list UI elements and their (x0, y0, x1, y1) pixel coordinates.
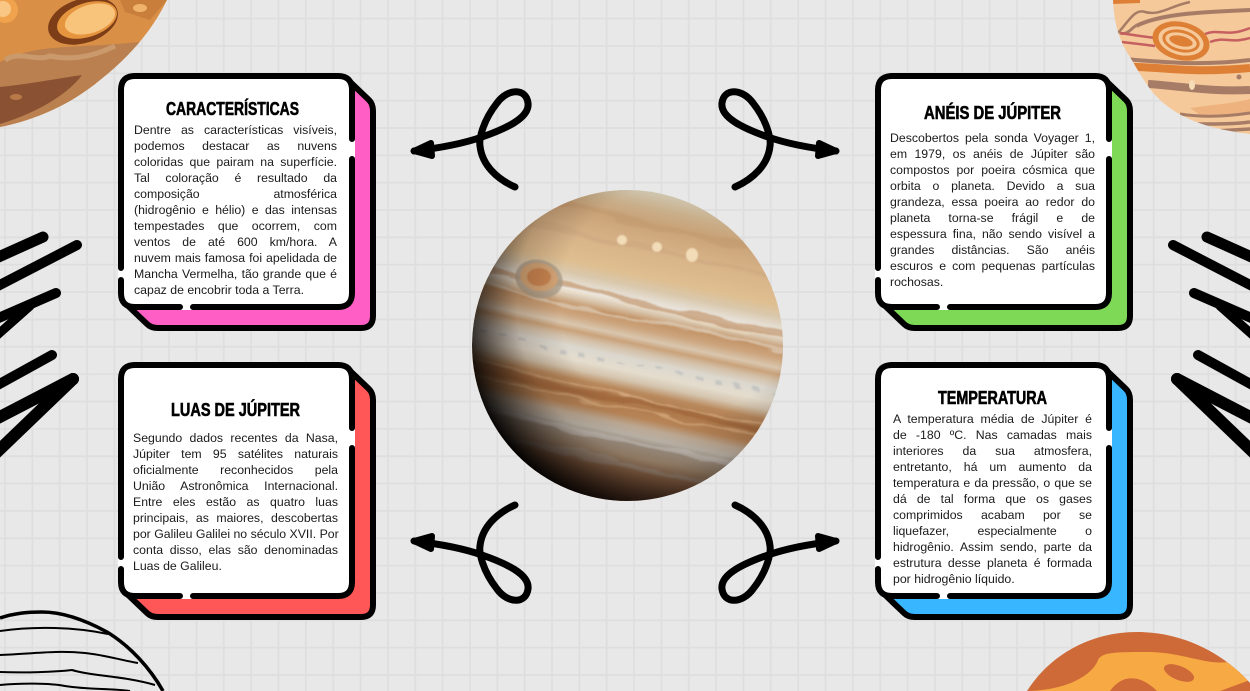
text block: espessura fina, não sendo visível a (890, 227, 1095, 241)
decorative planet: top right (1113, 0, 1250, 134)
text block: Entre eles estão as quatro luas (133, 495, 338, 509)
text block: Júpiter tem 95 satélites naturais (133, 447, 338, 461)
heading: TEMPERATURA (938, 388, 1047, 408)
text block: compostos por poeira cósmica que (890, 163, 1095, 177)
panel: temperatura (875, 362, 1133, 620)
text block: conta disso, elas são denominadas (133, 543, 338, 557)
text block: de -180 ºC. Nas camadas mais (893, 428, 1092, 442)
text block: Luas de Galileu. (133, 559, 222, 573)
text block: ventos de até 600 km/hora. A (134, 235, 337, 249)
text block: Dentre as características visíveis, (134, 123, 337, 137)
text block: interiores da sua atmosfera, (893, 444, 1092, 458)
text block: rochosas. (890, 275, 943, 289)
text block: liquefazer, especialmente o (893, 524, 1092, 538)
planet: Jupiter (472, 190, 783, 501)
storm oval (48, 0, 118, 45)
text block: podemos destacar as nuvens (134, 139, 337, 153)
panel: características (118, 73, 376, 331)
text block: grandeza, essa poeira ao redor do (890, 195, 1095, 209)
panel: anéis de júpiter (875, 73, 1133, 331)
text block: estrutura desse planeta é formada (893, 556, 1092, 570)
text block: coloridas que pairam na superfície. (134, 155, 337, 169)
text block: tempestades que ocorrem, com (134, 219, 337, 233)
text block: planeta torna-se frágil e de (890, 211, 1095, 225)
text block (134, 123, 337, 297)
heading: LUAS DE JÚPITER (171, 399, 300, 420)
text block: por hidrogênio líquido. (893, 572, 1015, 586)
text block: orbita o planeta. Devido a sua (890, 179, 1095, 193)
text block: Mancha Vermelha, tão grande que é (134, 267, 337, 281)
heading: ANÉIS DE JÚPITER (924, 102, 1061, 123)
text block: (hidrogênio e hélio) e das intensas (134, 203, 337, 217)
decorative planet: bottom right (1027, 632, 1250, 691)
text block: nuvem mais famosa foi apelidada de (134, 251, 337, 265)
text block (133, 431, 339, 573)
text block: dá de tal forma que os gases (893, 492, 1092, 506)
text block: Descobertos pela sonda Voyager 1, (890, 131, 1095, 145)
text block: temperatura e da pressão, o que se (893, 476, 1092, 490)
text block: A temperatura média de Júpiter é (893, 412, 1092, 426)
text block: Tal coloração é resultado da (134, 171, 337, 185)
text block: em 1979, os anéis de Júpiter são (890, 147, 1095, 161)
text block: Segundo dados recentes da Nasa, (133, 431, 338, 445)
text block: por Galileu Galilei no século XVII. Por (133, 527, 339, 541)
text block: capaz de encobrir toda a Terra. (134, 283, 304, 297)
text block (893, 412, 1092, 586)
panel: luas de júpiter (118, 362, 376, 620)
text block (890, 131, 1095, 289)
text block: hidrogênio. Assim sendo, parte da (893, 540, 1092, 554)
storm: great red spot (515, 259, 564, 299)
text block: composição atmosférica (134, 187, 337, 201)
text block: entretanto, há um aumento da (893, 460, 1092, 474)
white oval storms (617, 235, 698, 262)
text block: oficialmente reconhecidos pela (133, 463, 338, 477)
decorative planet: top left (0, 0, 167, 127)
text block: escuros e com pequenas partículas (890, 259, 1095, 273)
heading: CARACTERÍSTICAS (166, 98, 299, 119)
text block: União Astronômica Internacional. (133, 479, 338, 493)
text block: grandes distâncias. São anéis (890, 243, 1095, 257)
text block: principais, as maiores, descobertas (133, 511, 338, 525)
text block: comprimidos acabam por se (893, 508, 1092, 522)
